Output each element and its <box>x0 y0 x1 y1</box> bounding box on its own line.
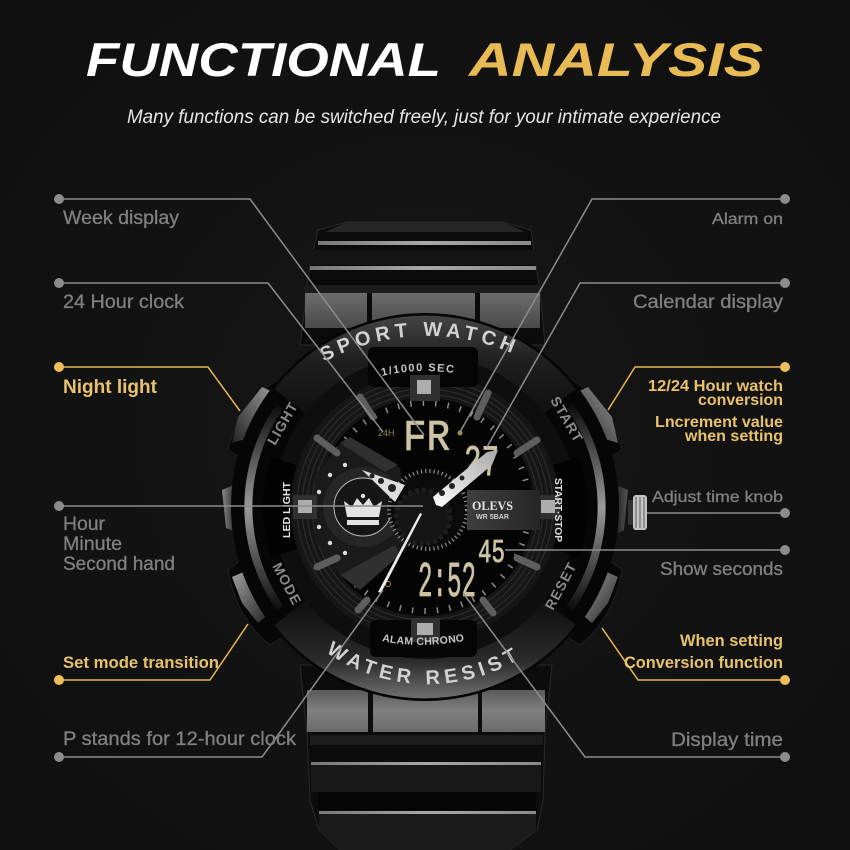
dial markers <box>293 375 560 642</box>
callout: Hour Minute Second hand: Hour <box>63 514 106 535</box>
callout: Display time <box>463 593 790 762</box>
bezel labels: WATER RESIST <box>328 640 515 684</box>
callout: Show seconds <box>505 545 790 579</box>
callout: Hour Minute Second hand: Minute <box>63 534 122 555</box>
digital display: 2:52 <box>418 555 476 612</box>
callout: Hour Minute Second hand <box>54 501 423 575</box>
callout: 12/24 Hour watch conversion: Lncrement value <box>655 414 783 431</box>
title: FUNCTIONAL <box>86 33 441 86</box>
watch hands <box>362 450 498 593</box>
outer bezel <box>231 313 619 701</box>
callout: Display time: Display time <box>671 730 783 751</box>
bezel labels: SPORT WATCH <box>320 322 516 360</box>
dial text: ALAM CHRONO <box>382 634 464 645</box>
callout: Week display: Week display <box>63 208 180 229</box>
digital display: FR <box>403 414 450 464</box>
callout: Night light <box>54 362 240 411</box>
callout: Hour Minute Second hand: Second hand <box>63 554 175 575</box>
callout: When setting conversion function: When setting <box>680 631 783 650</box>
callout: Week display <box>54 194 424 435</box>
side buttons <box>222 380 628 645</box>
callout: Alarm on <box>460 194 790 432</box>
digital display: 24H <box>378 428 395 438</box>
callout: 12/24 Hour watch conversion: conversion <box>698 392 783 409</box>
callout: Adjust time knob <box>647 489 790 518</box>
title: ANALYSIS <box>468 33 763 86</box>
callout: When setting conversion function: Conversion function <box>624 653 783 672</box>
dial text: 1/1000 SEC <box>381 363 454 376</box>
callout: Set mode transition: Set mode transition <box>63 653 219 672</box>
dial <box>291 373 559 641</box>
watch illustration <box>222 222 647 850</box>
callout: Set mode transition <box>54 624 248 685</box>
brand plate: WR 5BAR <box>476 514 509 521</box>
callout: P stands for 12-hour clock <box>54 590 383 762</box>
callout: 12/24 Hour watch conversion: 12/24 Hour watch <box>648 378 783 395</box>
callout: Adjust time knob: Adjust time knob <box>652 489 783 506</box>
bezel labels: MODE <box>269 560 305 608</box>
dial text: LED LIGHT <box>282 482 293 538</box>
callout: 12/24 Hour watch conversion <box>608 362 790 445</box>
bezel labels <box>264 322 587 684</box>
callout: 24 Hour clock: 24 Hour clock <box>63 292 185 313</box>
adjust knob <box>628 495 647 530</box>
callout: 24 Hour clock <box>54 278 383 432</box>
callout: Calendar display: Calendar display <box>633 292 784 313</box>
bezel labels: LIGHT <box>264 399 301 448</box>
watch strap <box>300 222 552 850</box>
callout: Show seconds: Show seconds <box>660 559 783 579</box>
brand plate: OLEVS <box>472 498 513 513</box>
callout: When setting conversion function <box>602 628 790 685</box>
brand plate <box>467 490 540 530</box>
callout: Alarm on: Alarm on <box>712 211 783 228</box>
dial text: START·STOP <box>552 478 563 542</box>
crown logo <box>344 494 382 525</box>
callout: Calendar display <box>487 278 790 447</box>
title <box>86 33 763 86</box>
bezel labels: START <box>547 394 587 445</box>
subtitle: Many functions can be switched freely, just for your intimate experience <box>127 107 721 128</box>
digital display <box>378 414 505 612</box>
bezel labels: RESET <box>542 559 580 612</box>
digital display: 45 <box>478 535 505 572</box>
dial text <box>282 363 563 645</box>
top and bottom windows <box>368 347 478 657</box>
callout: 12/24 Hour watch conversion: when setting <box>684 428 783 445</box>
callout: P stands for 12-hour clock: P stands for 12-hour clock <box>63 729 297 750</box>
callout: Night light: Night light <box>63 377 158 398</box>
digital display: 27 <box>464 439 499 489</box>
